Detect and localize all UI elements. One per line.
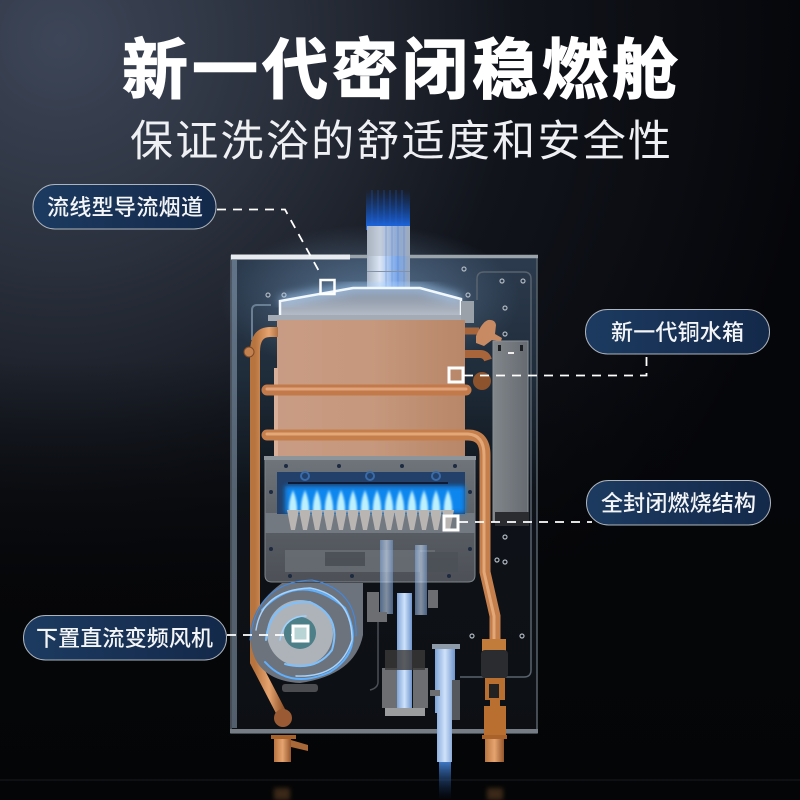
- callout: copper tank label: 新一代铜水箱: [611, 320, 744, 345]
- heat exchanger copper tank: [274, 320, 465, 456]
- callout: fan label: [24, 616, 226, 660]
- callout: flue label: 流线型导流烟道: [47, 195, 203, 220]
- fan housing: [250, 583, 363, 692]
- floor reflections: [274, 788, 503, 800]
- burner nozzles: [287, 510, 454, 530]
- callout: flue leader and marker: [217, 210, 334, 294]
- gas valve assemblies: [367, 590, 460, 720]
- callout: combustion leader and marker: [444, 516, 592, 530]
- pipe end cap: [244, 347, 254, 357]
- subtitle: 保证洗浴的舒适度和安全性: [130, 118, 671, 166]
- left water inlet: [271, 709, 308, 762]
- fan blue swirl: [250, 580, 356, 679]
- flue plume: [366, 190, 410, 230]
- right upper copper fittings: [465, 320, 502, 390]
- right water valve: [481, 639, 508, 762]
- callout: fan label: 下置直流变频风机: [36, 626, 213, 651]
- copper loop pipes: [267, 389, 495, 642]
- callout: copper tank leader and marker: [449, 354, 646, 382]
- right side bracket: [493, 341, 529, 526]
- callout: combustion label: [586, 480, 770, 525]
- flame window with blue flames: [277, 472, 465, 514]
- callout: combustion label: 全封闭燃烧结构: [601, 491, 756, 516]
- flue hood: [268, 288, 474, 323]
- combustion chamber box: [264, 456, 476, 582]
- left copper pipe: [255, 332, 283, 716]
- callout: flue label: [33, 184, 216, 229]
- flue pipe: [367, 226, 410, 288]
- fan center hub: [293, 626, 308, 641]
- water heater illustration: [220, 190, 538, 800]
- callout: copper tank label: [586, 310, 770, 354]
- title: 新一代密闭稳燃舱: [122, 33, 678, 107]
- back panel: [220, 225, 538, 733]
- gas and water glass pipes: [380, 540, 460, 800]
- callout: fan leader and marker: [227, 626, 308, 641]
